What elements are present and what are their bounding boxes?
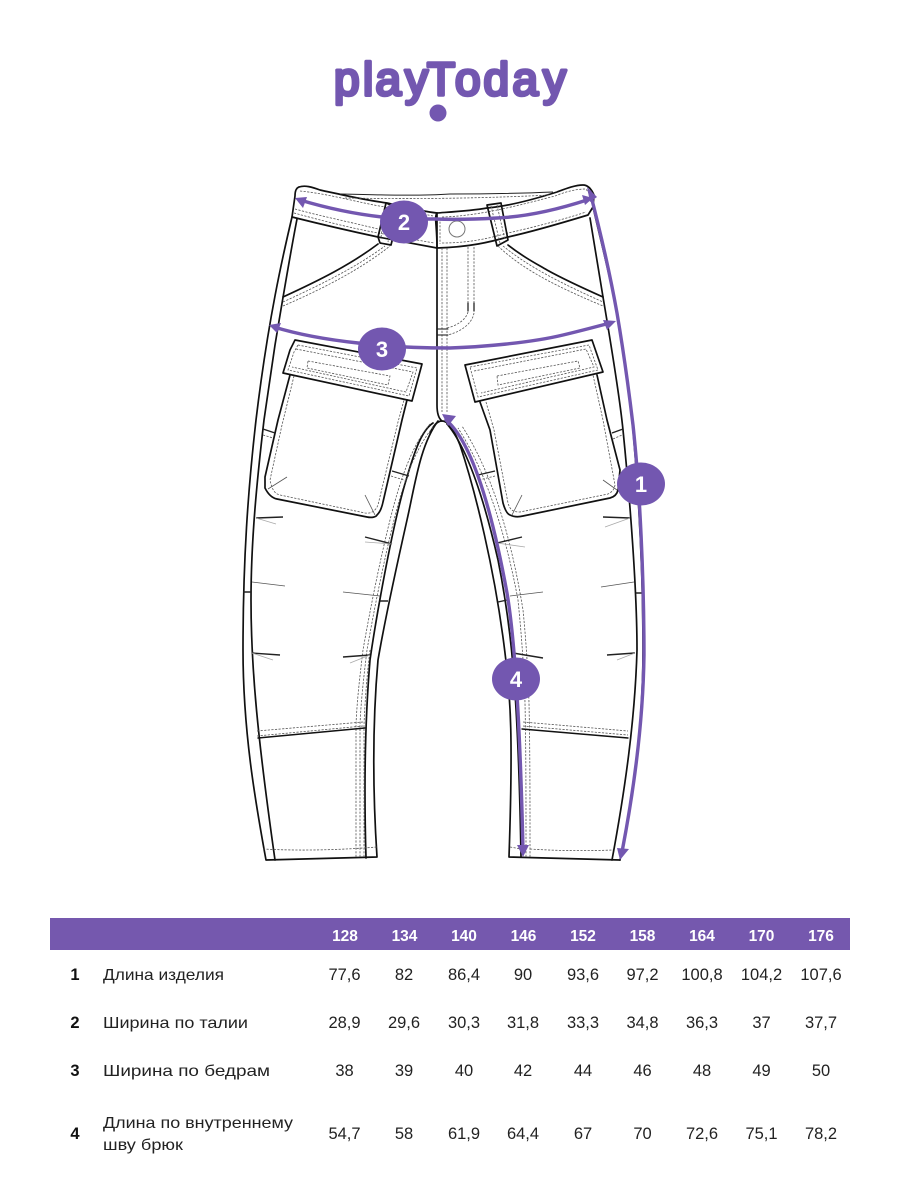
row 2: 29,6 <box>388 1014 420 1032</box>
table header: 140 <box>451 928 477 945</box>
row 2: Ширина по талии <box>103 1015 248 1032</box>
badge 2: 2 <box>398 210 410 235</box>
table header: 152 <box>570 928 596 945</box>
row 1: 104,2 <box>741 966 782 984</box>
row 1: 100,8 <box>681 966 723 984</box>
row 1: Длина изделия <box>103 967 224 984</box>
row 3: 38 <box>335 1062 354 1080</box>
row 4: 58 <box>395 1125 413 1143</box>
row 1: 1 <box>70 966 80 984</box>
inseam stitching <box>356 424 530 857</box>
row 1: 107,6 <box>800 966 842 984</box>
row 3: 3 <box>70 1062 80 1080</box>
row 3: 39 <box>395 1062 413 1080</box>
badge 4: 4 <box>510 667 523 692</box>
row 3: 49 <box>752 1062 771 1080</box>
row 2: 33,3 <box>567 1014 599 1032</box>
table header: 146 <box>511 928 537 945</box>
pants technical drawing <box>243 185 643 860</box>
row 4: 72,6 <box>686 1125 718 1143</box>
side ticks <box>243 429 642 602</box>
measure 3: hips arrow <box>269 320 616 348</box>
measure 4: inseam arrow <box>442 414 529 857</box>
row 2: 30,3 <box>448 1014 480 1032</box>
table header <box>50 918 850 950</box>
row 4: шву брюк <box>103 1137 184 1154</box>
badge 4 <box>492 658 540 700</box>
row 3 <box>70 1062 830 1080</box>
badge 1: 1 <box>635 472 647 497</box>
row 4: 70 <box>633 1125 652 1143</box>
button <box>449 221 465 237</box>
row 2 <box>70 1014 837 1032</box>
row 1: 86,4 <box>448 966 480 984</box>
waistband <box>292 185 594 248</box>
belt loops <box>378 203 508 246</box>
table header: 176 <box>808 928 834 945</box>
row 4: 61,9 <box>448 1125 480 1143</box>
row 4: 75,1 <box>745 1125 778 1143</box>
size table <box>50 918 850 1154</box>
row 3: 46 <box>633 1062 652 1080</box>
cargo pocket: left <box>265 340 422 517</box>
row 1: 77,6 <box>328 966 361 984</box>
row 3: 40 <box>455 1062 473 1080</box>
measure 2: waist arrow <box>295 195 593 219</box>
wrinkles <box>252 477 635 663</box>
badge 2 <box>380 200 428 244</box>
row 3: 48 <box>693 1062 711 1080</box>
badge 3: 3 <box>376 337 388 362</box>
table header: 158 <box>630 928 656 945</box>
row 2: 28,9 <box>328 1014 361 1032</box>
row 3: Ширина по бедрам <box>103 1063 270 1080</box>
row 4: 54,7 <box>328 1125 361 1143</box>
cargo pocket: right <box>465 340 620 517</box>
row 4: 64,4 <box>507 1125 539 1143</box>
row 2: 31,8 <box>507 1014 539 1032</box>
row 1: 90 <box>514 966 532 984</box>
row 1: 97,2 <box>626 966 659 984</box>
fly <box>438 247 474 412</box>
row 2: 36,3 <box>686 1014 718 1032</box>
row 1 <box>70 966 842 984</box>
table header: 170 <box>749 928 774 945</box>
row 2: 34,8 <box>626 1014 659 1032</box>
row 4: 67 <box>574 1125 592 1143</box>
row 3: 50 <box>812 1062 830 1080</box>
row 4: 78,2 <box>805 1125 837 1143</box>
row 4: 4 <box>70 1125 80 1143</box>
row 4: Длина по внутреннему <box>103 1115 293 1132</box>
knee seams and hems <box>257 722 628 851</box>
row 1: 82 <box>395 966 413 984</box>
row 2: 2 <box>70 1014 80 1032</box>
table header: 164 <box>689 928 715 945</box>
badge 3 <box>358 328 406 370</box>
row 2: 37,7 <box>805 1014 837 1032</box>
row 2: 37 <box>752 1014 771 1032</box>
row 4 <box>70 1115 837 1154</box>
table header: 128 <box>332 928 358 945</box>
badge 1 <box>617 462 665 506</box>
row 1: 93,6 <box>567 966 599 984</box>
row 3: 44 <box>574 1062 592 1080</box>
slant pockets <box>283 244 603 306</box>
row 3: 42 <box>514 1062 532 1080</box>
side seams and legs <box>243 207 643 860</box>
logo: playToday: playToday <box>334 53 566 105</box>
table header: 134 <box>392 928 418 945</box>
measure 1: length arrow <box>587 187 644 860</box>
